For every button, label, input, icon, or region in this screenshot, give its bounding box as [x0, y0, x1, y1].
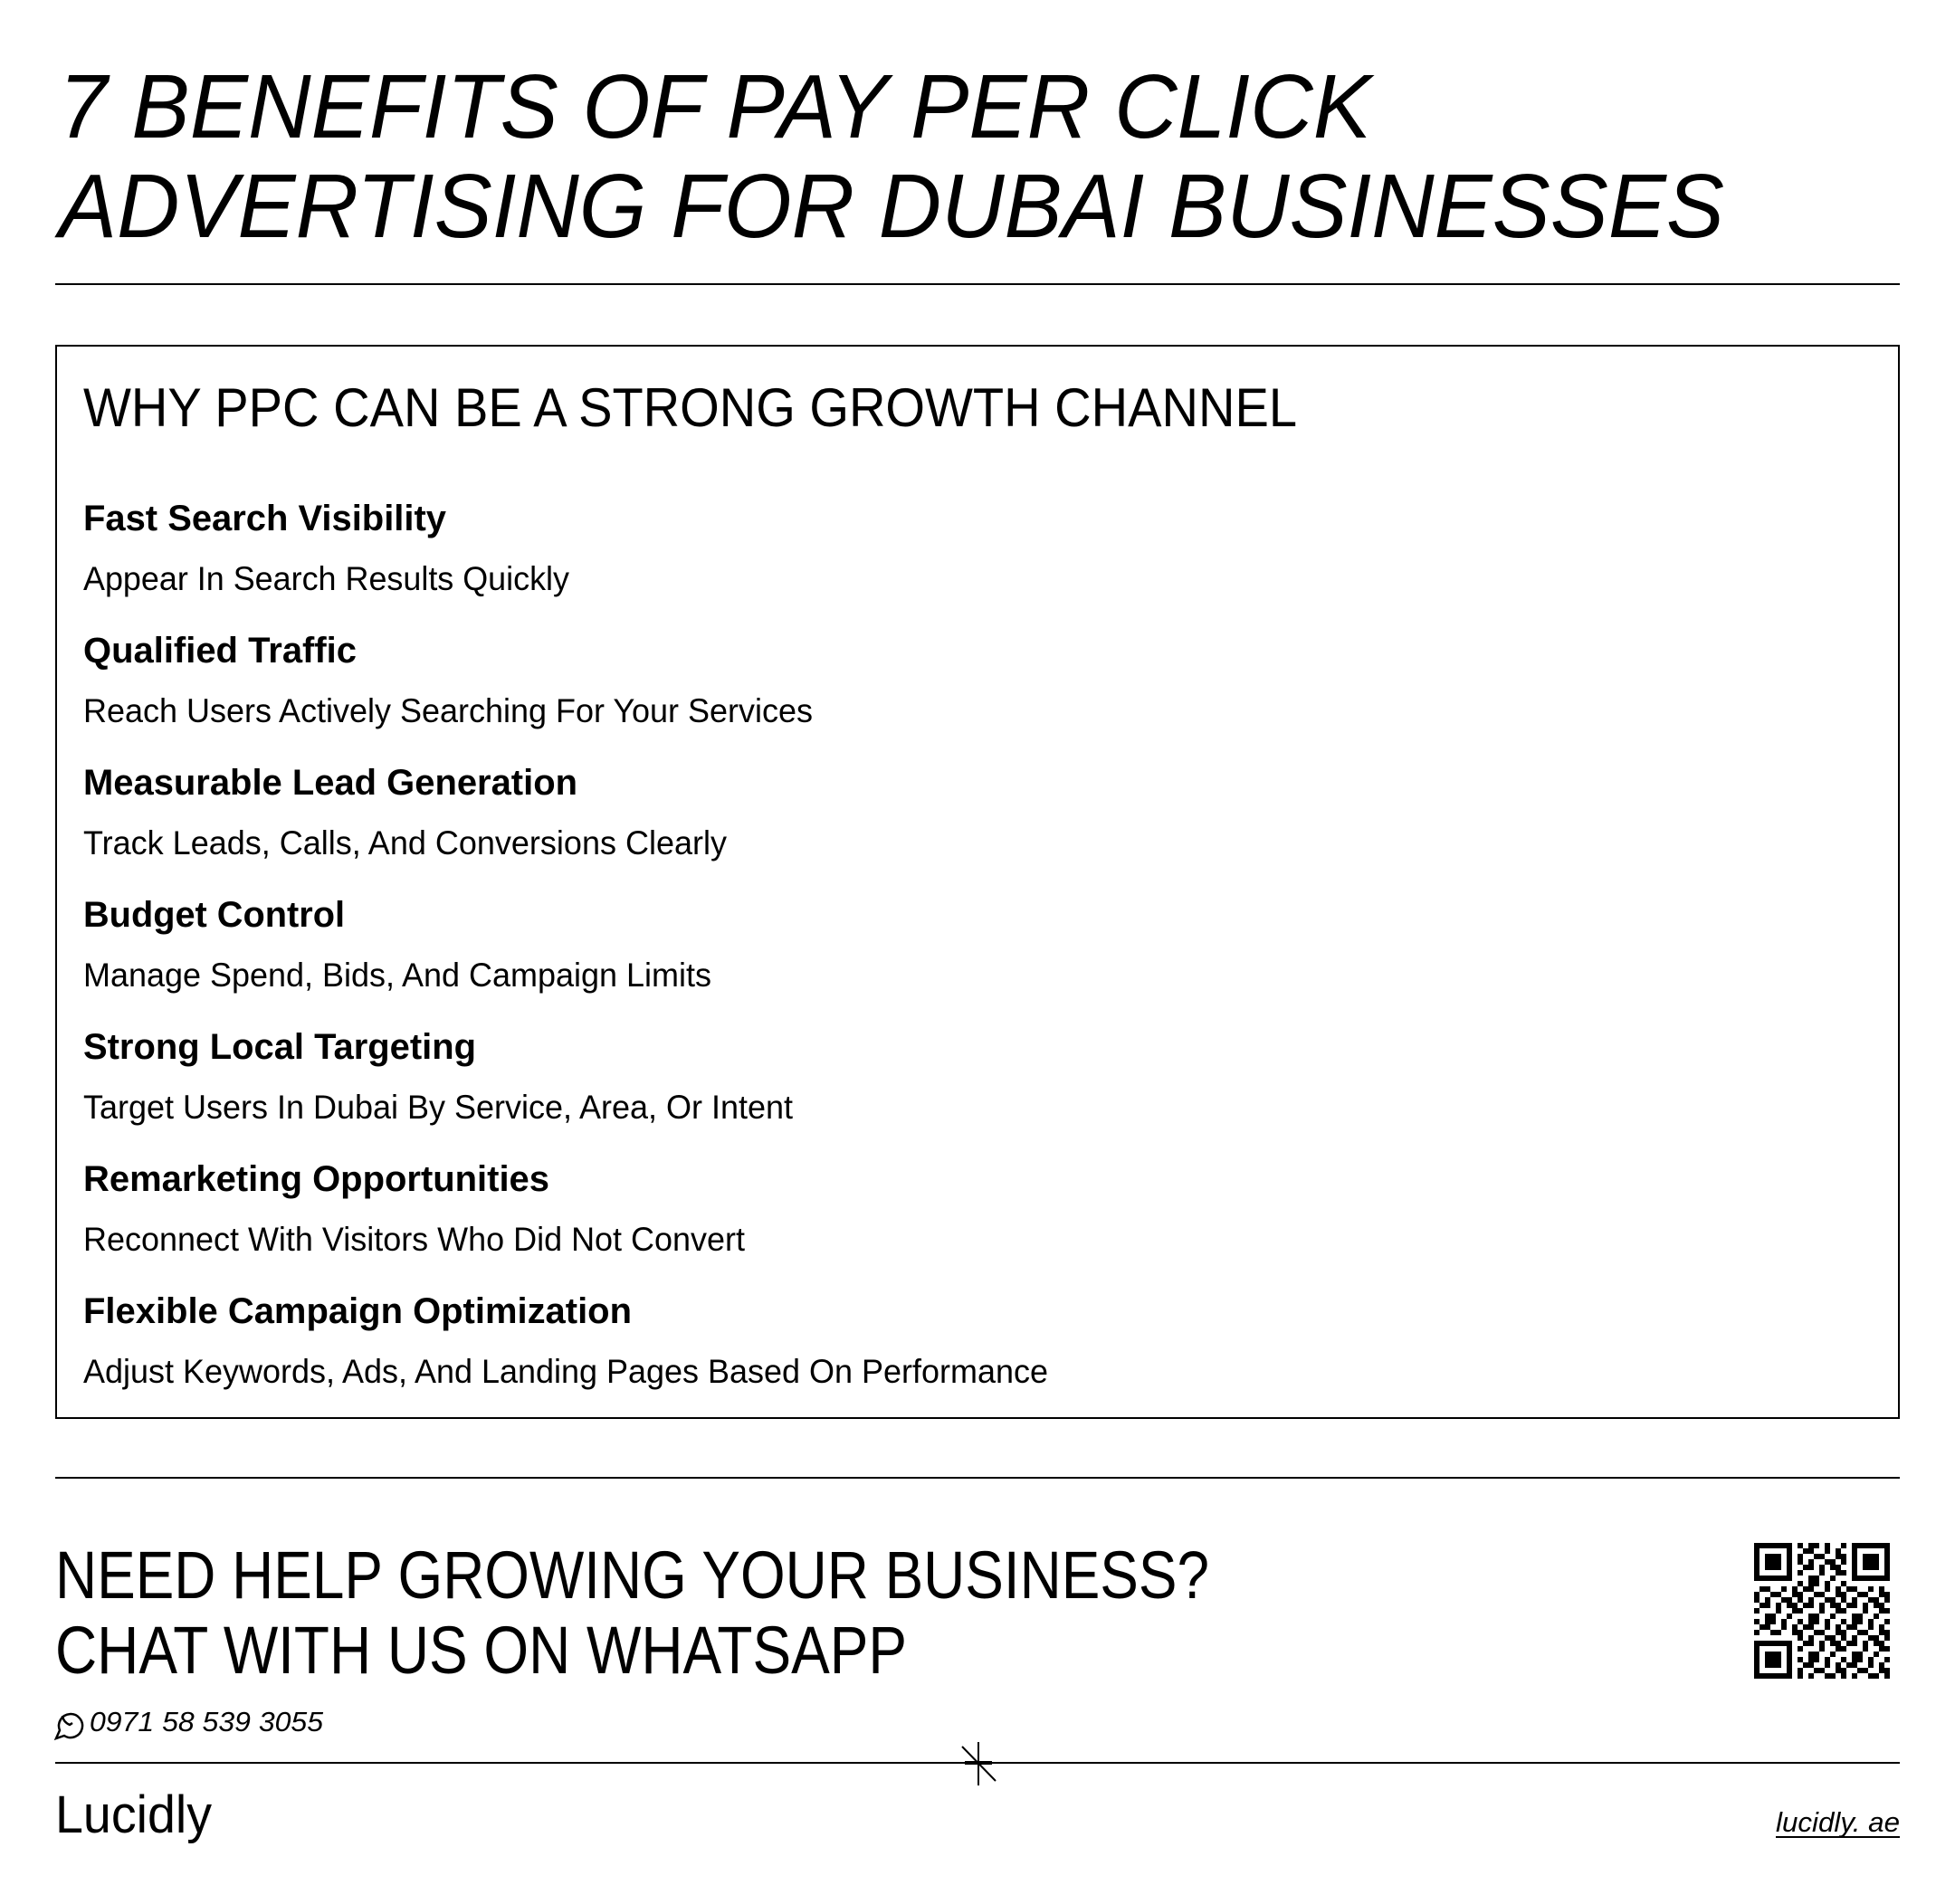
benefit 7: Adjust Keywords, Ads, And Landing Pages Based On Performance [83, 1353, 1048, 1390]
benefit 3: Measurable Lead Generation [83, 763, 577, 803]
title: 7 BENEFITS OF PAY PER CLICK [59, 56, 1375, 157]
call to action [55, 1537, 1209, 1688]
benefit 3 [83, 763, 727, 862]
benefit 2: Reach Users Actively Searching For Your Services [83, 692, 813, 729]
logo: Lucidly: Lucidly [55, 1785, 212, 1844]
call to action: NEED HELP GROWING YOUR BUSINESS? [55, 1537, 1209, 1613]
benefit 6 [83, 1159, 746, 1258]
title: ADVERTISING FOR DUBAI BUSINESSES [54, 156, 1724, 257]
benefit 4: Budget Control [83, 895, 345, 935]
benefit 5 [83, 1027, 794, 1126]
title [54, 56, 1724, 257]
icon: whatsapp [56, 1714, 82, 1738]
benefit 2: Qualified Traffic [83, 631, 357, 671]
benefit 4: Manage Spend, Bids, And Campaign Limits [83, 957, 711, 994]
website link: lucidly. ae [1776, 1806, 1900, 1838]
phone contact: 0971 58 539 3055 [90, 1706, 324, 1737]
icon: star mark [962, 1742, 996, 1785]
benefit 5: Target Users In Dubai By Service, Area, Or Intent [83, 1089, 794, 1126]
benefit 3: Track Leads, Calls, And Conversions Clearly [83, 824, 727, 862]
panel: benefits [56, 346, 1899, 1418]
benefit 6: Remarketing Opportunities [83, 1159, 549, 1199]
qr code [1754, 1543, 1890, 1679]
benefit 7: Flexible Campaign Optimization [83, 1291, 632, 1331]
benefit 1: Fast Search Visibility [83, 499, 447, 538]
benefit 2 [83, 631, 813, 729]
benefit 5: Strong Local Targeting [83, 1027, 476, 1067]
benefit 6: Reconnect With Visitors Who Did Not Convert [83, 1221, 746, 1258]
benefit 1 [83, 499, 569, 597]
call to action: CHAT WITH US ON WHATSAPP [55, 1613, 907, 1688]
benefit 7 [83, 1291, 1048, 1390]
benefit 1: Appear In Search Results Quickly [83, 560, 569, 597]
benefit 4 [83, 895, 711, 994]
panel heading: WHY PPC CAN BE A STRONG GROWTH CHANNEL [83, 377, 1297, 438]
